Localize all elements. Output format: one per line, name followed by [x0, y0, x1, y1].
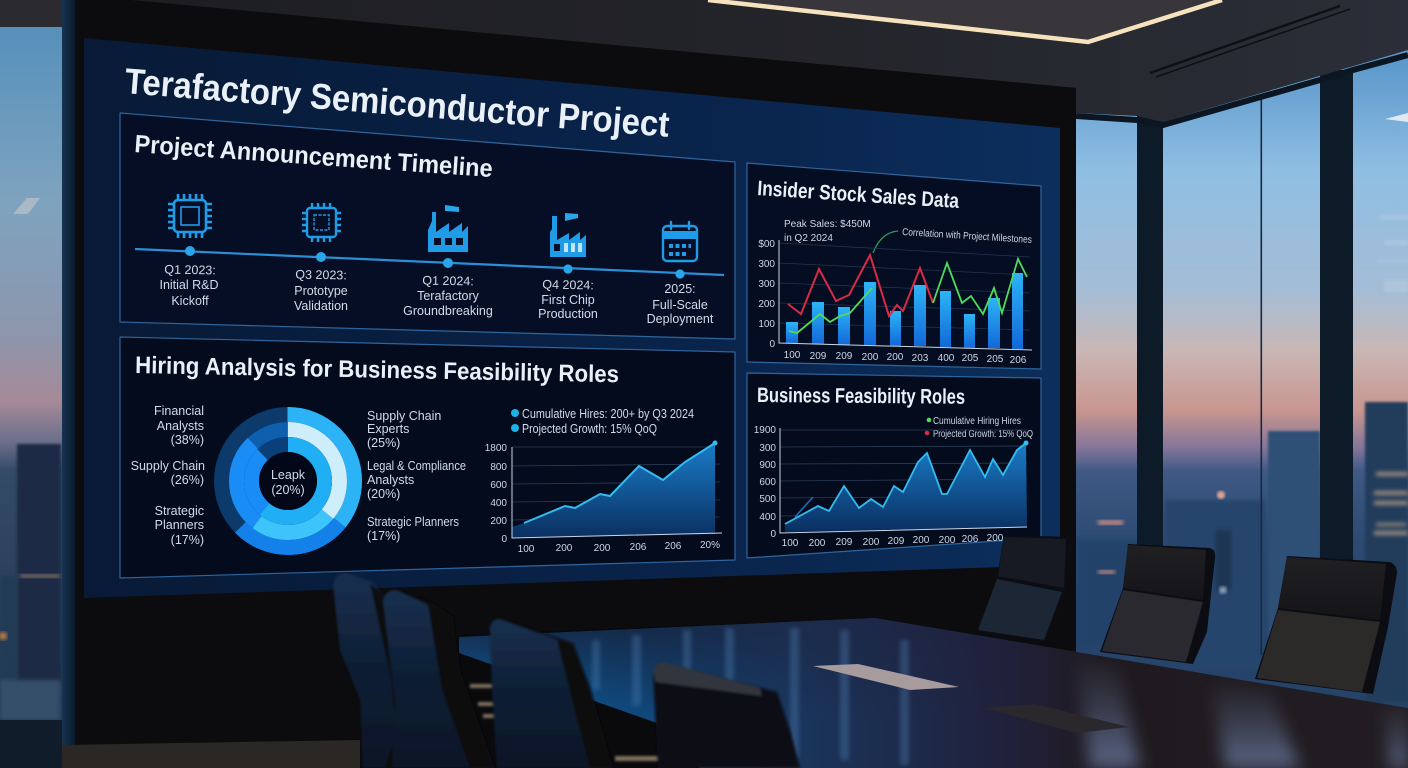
milestone label: Q1 2023: Kickoff	[171, 294, 209, 308]
area chart: roles: 500	[759, 494, 776, 505]
panel: business feasibility roles	[747, 373, 1041, 558]
peak annotation: Peak Sales: $450M	[784, 219, 871, 230]
donut labels left: (17%)	[171, 533, 204, 547]
milestone label: Q1 2024: Q1 2024:	[422, 274, 474, 288]
donut labels left: Supply Chain	[131, 459, 205, 473]
donut labels left: Strategic	[155, 504, 204, 518]
table legs	[460, 653, 665, 768]
donut labels left: Planners	[155, 518, 204, 532]
milestone label: Q4 2024: Q4 2024:	[542, 278, 594, 292]
area chart: roles: 200	[939, 535, 956, 546]
area chart: hires: 200	[490, 516, 507, 527]
background: right windows	[1076, 50, 1408, 768]
combo chart: stock sales: 206	[1010, 355, 1027, 366]
donut labels right: Analysts	[367, 473, 414, 487]
chair 3	[490, 619, 613, 768]
area chart: roles: 200	[863, 537, 880, 548]
area chart: roles: 200	[913, 535, 930, 546]
area chart: hires: 206	[630, 542, 647, 553]
donut labels right: Supply Chain	[367, 409, 441, 423]
combo chart: stock sales: 100	[758, 319, 775, 330]
area chart: roles: 600	[759, 477, 776, 488]
combo chart: stock sales: 200	[758, 299, 775, 310]
peak annotation	[784, 219, 871, 244]
timeline line	[135, 249, 724, 275]
combo chart: stock sales: 400	[938, 353, 955, 364]
donut labels left: Analysts	[157, 419, 204, 433]
background: left window	[0, 0, 64, 768]
milestone label: Q4 2024	[538, 278, 598, 321]
screen	[84, 38, 1060, 598]
icon: factory 2	[550, 213, 586, 257]
title: Terafactory Semiconductor Project	[123, 60, 671, 145]
correlation annotation: Correlation with Project Milestones	[902, 227, 1032, 246]
combo chart: stock sales: 300	[758, 259, 775, 270]
area chart: roles	[754, 425, 1028, 549]
donut labels right: (17%)	[367, 529, 400, 543]
milestone label: Q3 2023: Prototype	[294, 284, 348, 298]
area chart legend	[511, 407, 694, 436]
area chart: roles: 100	[782, 538, 799, 549]
ceiling	[0, 0, 1408, 125]
chair A	[976, 535, 1073, 642]
conference table	[459, 618, 1408, 768]
milestone label: Q3 2023: Q3 2023:	[295, 268, 347, 282]
combo chart: stock sales: 100	[784, 350, 801, 361]
area chart: hires: 1800	[485, 443, 507, 454]
donut labels left: (26%)	[171, 473, 204, 487]
milestone label: Q1 2024: Terafactory	[417, 289, 480, 303]
area chart: hires: 20%	[700, 540, 720, 551]
chair B	[1100, 544, 1215, 664]
area chart: roles: 0	[770, 529, 776, 540]
area chart: hires	[485, 440, 722, 555]
donut center label: Leapk	[271, 468, 306, 482]
bars	[786, 273, 1023, 349]
area chart: hires: 100	[518, 544, 535, 555]
area chart: roles: 300	[759, 443, 776, 454]
donut center label: (20%)	[271, 483, 305, 497]
area chart: hires: 200	[594, 543, 611, 554]
donut labels left: (38%)	[171, 433, 204, 447]
panel: insider stock sales	[747, 163, 1041, 369]
wall behind screen	[62, 0, 1076, 768]
milestone label: 2025: Full-Scale	[652, 298, 708, 312]
combo chart: stock sales: 203	[912, 353, 929, 364]
panel: project announcement timeline	[120, 113, 735, 339]
combo chart: stock sales: 209	[836, 351, 853, 362]
area chart: roles: 209	[888, 536, 905, 547]
donut labels left: Financial	[154, 404, 204, 418]
green lines	[789, 288, 872, 333]
milestone label: Q1 2023	[159, 263, 219, 308]
combo chart: stock sales: $00	[758, 239, 775, 250]
donut labels right: Experts	[367, 422, 409, 436]
donut center label	[271, 468, 306, 497]
chair 2	[383, 590, 495, 768]
peak annotation: in Q2 2024	[784, 233, 833, 244]
area chart legend: Projected Growth: 15% QoQ	[522, 422, 657, 436]
correlation annotation	[873, 227, 1032, 253]
combo chart: stock sales: 209	[810, 351, 827, 362]
icon: calendar	[663, 222, 697, 261]
milestone label: Q4 2024: First Chip	[541, 293, 595, 307]
milestone nodes	[185, 246, 685, 279]
area chart: roles: 1900	[754, 425, 776, 436]
icon: chip 2	[302, 203, 341, 242]
combo chart: stock sales: 300	[758, 279, 775, 290]
milestone label: Q1 2023: Q1 2023:	[164, 263, 216, 277]
milestone label: Q3 2023: Validation	[294, 299, 348, 313]
area chart: roles: 209	[836, 537, 853, 548]
combo chart: stock sales: 205	[987, 354, 1004, 365]
area chart: hires: 0	[501, 534, 507, 545]
area chart: roles: 400	[759, 512, 776, 523]
chair C	[1255, 556, 1397, 694]
legend	[925, 416, 1033, 440]
combo chart: stock sales: 205	[962, 353, 979, 364]
donut labels right: (25%)	[367, 436, 400, 450]
heading: hiring analysis: Hiring Analysis for Business Feasibility Roles	[135, 352, 619, 388]
chairs: near side	[333, 573, 800, 768]
combo chart: stock sales: 200	[862, 352, 879, 363]
combo chart: stock sales: 200	[887, 352, 904, 363]
combo chart: stock sales	[758, 239, 1032, 366]
area chart: roles: 900	[759, 460, 776, 471]
donut labels right: Legal & Compliance	[367, 459, 466, 473]
area chart: roles: 200	[987, 533, 1004, 544]
area chart: hires: 400	[490, 498, 507, 509]
milestone label: 2025	[647, 282, 714, 326]
donut labels right: Strategic Planners	[367, 515, 459, 529]
area chart: hires: 200	[556, 543, 573, 554]
milestone label: Q1 2024	[403, 274, 493, 318]
legend: Cumulative Hiring Hires	[933, 416, 1021, 427]
panel: hiring analysis	[120, 337, 735, 578]
combo chart: stock sales: 0	[769, 339, 775, 350]
area chart legend: Cumulative Hires: 200+ by Q3 2024	[522, 407, 694, 421]
milestone label: Q3 2023	[294, 268, 348, 313]
area chart: hires: 600	[490, 480, 507, 491]
donut labels right	[367, 409, 466, 543]
chair 4	[653, 662, 800, 768]
red line	[788, 255, 933, 316]
milestone label: 2025: Deployment	[647, 312, 714, 326]
area chart: hires: 800	[490, 462, 507, 473]
milestone label: Q4 2024: Production	[538, 307, 598, 321]
icon: chip 1	[168, 194, 212, 238]
milestone label: Q1 2024: Groundbreaking	[403, 304, 493, 318]
area chart: roles: 200	[809, 538, 826, 549]
donut chart	[222, 414, 354, 548]
area chart: hires: 206	[665, 541, 682, 552]
area chart: roles: 206	[962, 534, 979, 545]
icon: factory 1	[428, 205, 468, 252]
milestone label: 2025: 2025:	[664, 282, 696, 296]
floor	[62, 740, 360, 768]
heading: insider stock sales: Insider Stock Sales Data	[757, 177, 960, 213]
donut labels right: (20%)	[367, 487, 400, 501]
chair 1	[333, 573, 405, 768]
donut labels left	[131, 404, 205, 547]
heading: business feasibility roles: Business Feasibility Roles	[757, 384, 965, 409]
chairs: far side	[976, 535, 1397, 694]
legend: Projected Growth: 15% QoQ	[933, 429, 1033, 440]
milestone label: Q1 2023: Initial R&D	[159, 278, 219, 292]
heading: timeline: Project Announcement Timeline	[134, 130, 494, 183]
